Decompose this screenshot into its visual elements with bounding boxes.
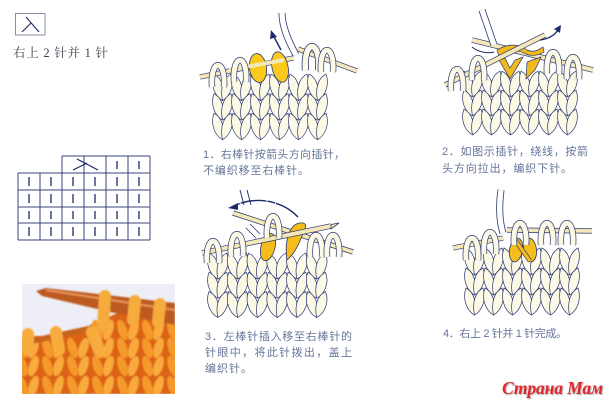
illustration: step 2	[445, 10, 593, 135]
caption: step 3: 编织针。	[205, 361, 252, 375]
caption: step 2: 2．如图示插针，绕线，按箭	[442, 144, 588, 158]
chart: stitch symbol grid	[18, 156, 150, 240]
caption: step 1: 1．右棒针按箭头方向插针，	[203, 147, 345, 161]
caption: step 4: 4．右上 2 针并 1 针完成。	[443, 326, 567, 340]
caption: step 2: 头方向拉出，编织下针。	[442, 161, 572, 175]
caption: step 3: 针眼中，将此针拨出，盖上	[205, 345, 352, 359]
watermark: Страна Мам	[502, 378, 603, 398]
illustration: step 1	[200, 13, 357, 140]
caption: step 1: 不编织移至右棒针。	[203, 163, 309, 177]
title: 右上 2 针并 1 针	[13, 45, 108, 60]
symbol box	[16, 14, 45, 35]
caption: step 3	[205, 329, 352, 375]
photo: knitted swatch	[22, 284, 175, 394]
illustration: step 3	[202, 190, 353, 317]
illustration: step 4	[453, 190, 592, 315]
caption: step 1	[203, 147, 345, 177]
caption: step 2	[442, 144, 588, 175]
caption: step 3: 3．左棒针插入移至右棒针的	[205, 329, 352, 343]
